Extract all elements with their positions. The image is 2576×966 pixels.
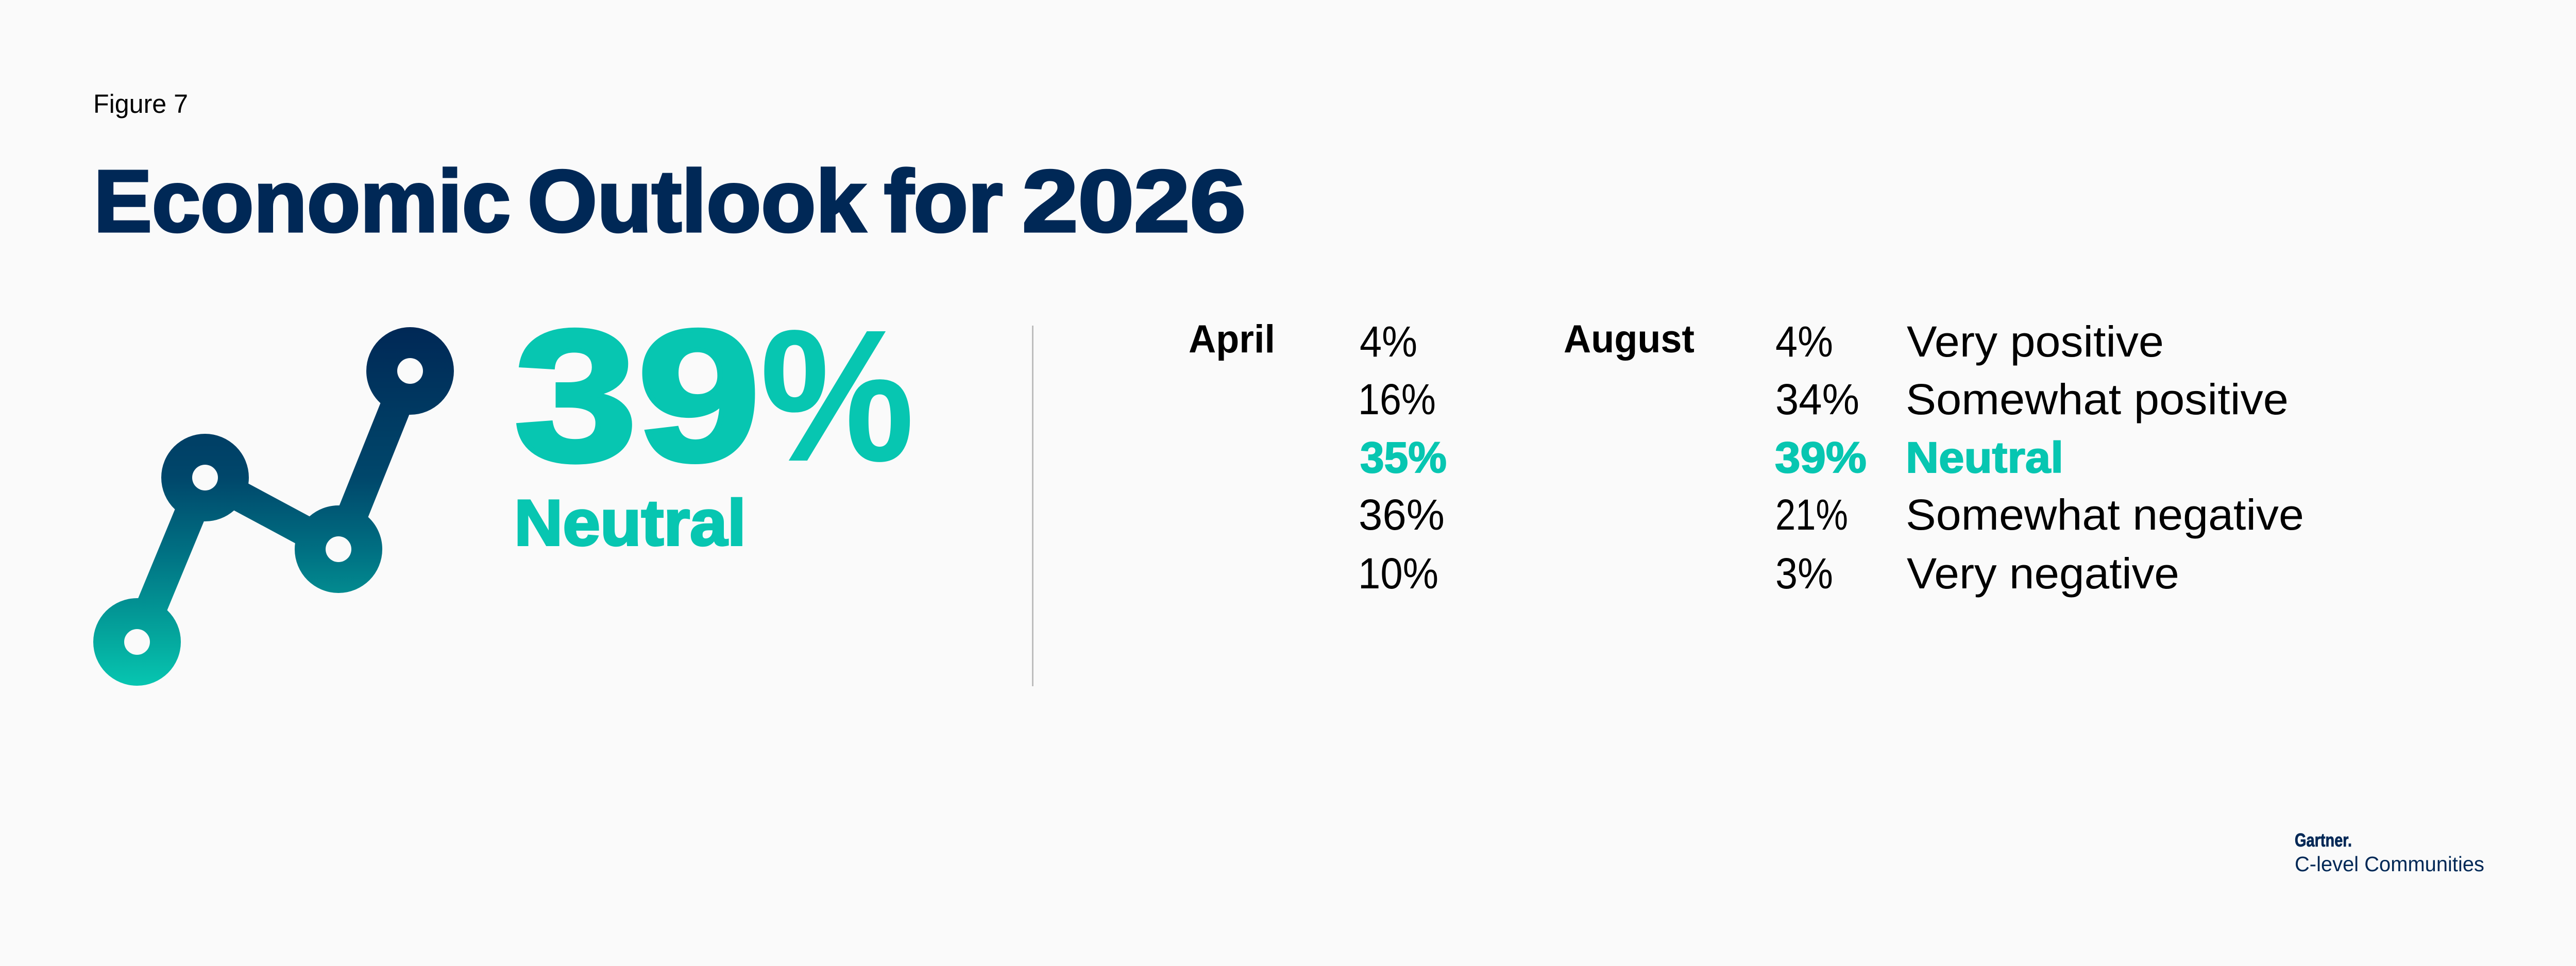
April very negative value: 10% bbox=[1358, 549, 1438, 598]
footer logo bbox=[2295, 829, 2484, 876]
big percentage: 39%: 39 bbox=[514, 291, 760, 500]
title bbox=[94, 152, 1246, 250]
table: response labels bbox=[1906, 317, 2304, 598]
label: Somewhat positive: Somewhat positive bbox=[1906, 375, 2289, 423]
label: Neutral: Neutral bbox=[1906, 433, 2063, 482]
April somewhat positive value: 16% bbox=[1358, 375, 1436, 423]
table: April column bbox=[1189, 317, 1447, 598]
table: August column bbox=[1564, 317, 1867, 598]
vertical divider bbox=[1032, 326, 1033, 686]
label: Somewhat negative: Somewhat negative bbox=[1906, 490, 2304, 539]
August somewhat positive value: 34% bbox=[1775, 375, 1859, 423]
August neutral value: 39% bbox=[1775, 433, 1867, 482]
big percentage: 39% bbox=[514, 291, 914, 500]
August very positive value: 4% bbox=[1775, 317, 1833, 366]
C-level Communities: C-level Communities bbox=[2295, 852, 2484, 876]
title: 2026 bbox=[1022, 152, 1246, 250]
title: Outlook bbox=[528, 152, 866, 250]
big label: Neutral: Neutral bbox=[514, 486, 746, 559]
big percentage: 39%: % bbox=[760, 291, 914, 500]
August heading: August bbox=[1564, 317, 1694, 361]
icon: rising line chart with gradient nodes bbox=[88, 322, 459, 690]
April heading: April bbox=[1189, 317, 1275, 361]
label: Very negative: Very negative bbox=[1907, 549, 2179, 598]
April somewhat negative value: 36% bbox=[1359, 490, 1445, 539]
April very positive value: 4% bbox=[1360, 317, 1417, 366]
title: Economic bbox=[94, 152, 511, 250]
August very negative value: 3% bbox=[1775, 549, 1833, 598]
Gartner wordmark: Gartner. bbox=[2295, 829, 2352, 851]
title: for bbox=[884, 152, 1003, 250]
August somewhat negative value: 21% bbox=[1775, 490, 1848, 539]
figure label: Figure 7 bbox=[93, 89, 188, 118]
label: Very positive: Very positive bbox=[1907, 317, 2164, 366]
April neutral value: 35% bbox=[1360, 433, 1447, 482]
